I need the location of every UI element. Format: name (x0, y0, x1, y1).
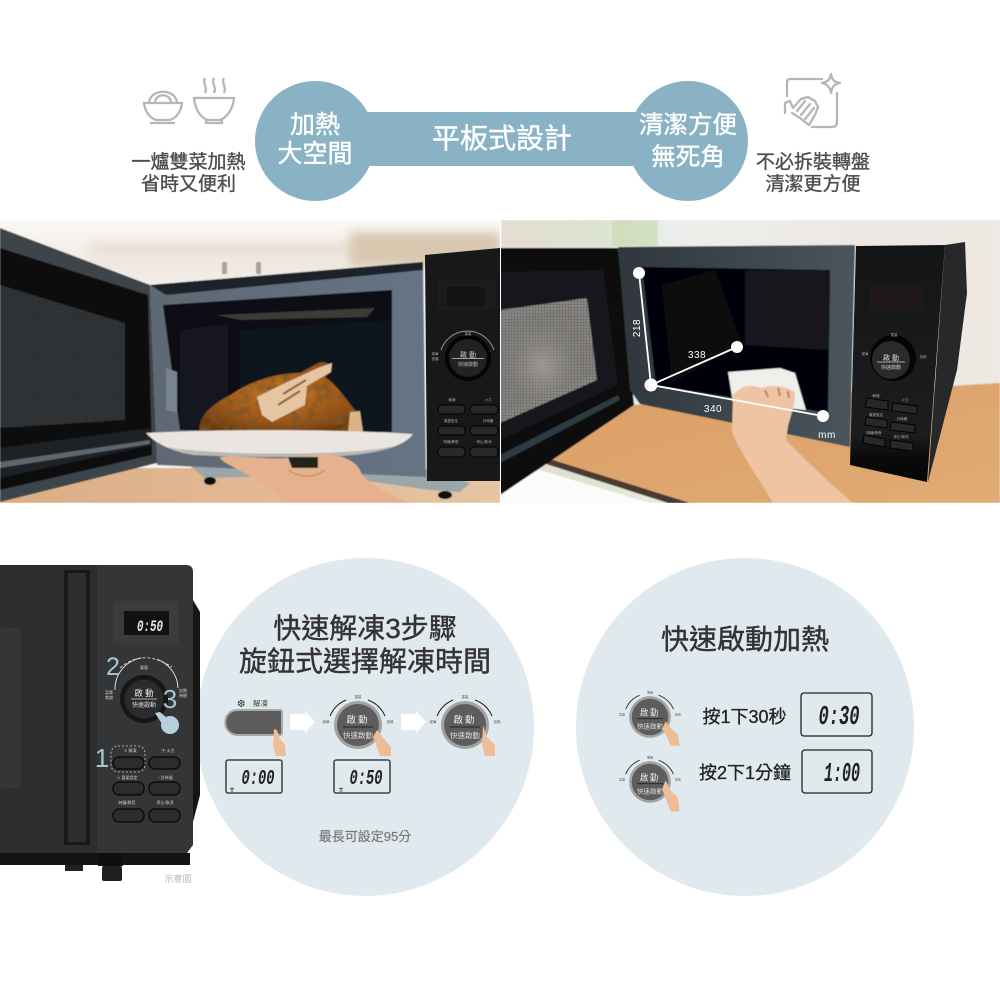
control panel: 解凍 (448, 397, 456, 402)
dial: press once: 重量 (647, 690, 653, 695)
dial with quick start: 重量 (140, 664, 148, 670)
text: heating: 加熱 (290, 111, 340, 139)
dial: press once: 加熱 (675, 711, 681, 716)
oven body (150, 262, 426, 477)
display 0:30 (801, 693, 872, 736)
heading: flat design: 平板式設計 (432, 123, 572, 154)
dial: press twice: 啟動 (640, 772, 660, 782)
open door (0, 228, 157, 502)
step 1: defrost button: 解凍 (253, 698, 268, 708)
step 3: dial: 啟動 (453, 714, 477, 726)
icon: pointing hand (155, 712, 179, 734)
dimension lines (633, 267, 829, 422)
button labels: ◔ 計時器 (157, 774, 173, 780)
dial: press once: 啟動 (640, 707, 660, 717)
control panel: 啟 動 (460, 350, 476, 359)
panel: defrost steps (225, 613, 501, 844)
control panel: 啟 動 (883, 353, 899, 362)
display 1:00: 1:00 (824, 760, 860, 790)
arm and hand (732, 386, 853, 503)
dial: press once: 快速啟動 (637, 721, 664, 730)
step 2: dial: 快速啟動 (343, 730, 373, 740)
control panel: 菜單 (432, 351, 439, 356)
control panel: 停止/取消 (894, 434, 909, 439)
control panel: 計時器 (483, 418, 494, 423)
roast chicken (199, 362, 363, 432)
dial with quick start: 快速啟動 (132, 701, 156, 709)
note: maximum 95 minutes: 最長可設定95分 (319, 829, 411, 844)
control panel: 快速啟動 (881, 364, 901, 371)
step 2: dial: 重量 (354, 694, 362, 699)
control panel (425, 248, 500, 481)
heading: knob-selected defrost time: 旋鈕式選擇解凍時間 (239, 646, 491, 677)
dial with quick start: 食譜 (105, 694, 113, 700)
control panel: 食譜 (432, 356, 439, 361)
control panel: 菜單 (862, 351, 869, 356)
step 1: defrost button: ❆ (237, 699, 245, 710)
text: two dishes: 一爐雙菜加熱 (131, 151, 246, 173)
circle: easy cleaning (628, 81, 748, 201)
oven body (618, 245, 855, 447)
text: large space: 大空間 (277, 140, 353, 168)
display 0:50: 0:50 (350, 768, 382, 791)
display 0:50 (124, 611, 169, 635)
dial: press twice (619, 755, 681, 812)
button labels: ▣ 火力 (161, 747, 175, 753)
text: easy to clean: 清潔方便 (639, 111, 737, 139)
dial with quick start: 加熱 (179, 687, 187, 693)
plate (146, 430, 413, 456)
display 0:00 (226, 760, 282, 794)
step 2: dial: 加熱 (386, 719, 394, 724)
oven cavity (642, 267, 830, 413)
icon: rice bowl (144, 92, 182, 123)
control panel: 快速啟動 (458, 361, 478, 368)
control panel: 火力 (902, 397, 909, 402)
text: no need to remove turntable: 不必拆裝轉盤 (756, 151, 870, 173)
button labels: 時鐘/靜音 (118, 799, 136, 805)
circle background: quick start (576, 558, 914, 896)
display 0:00: 0:00 (242, 768, 274, 791)
display 1:00 (802, 750, 872, 793)
step 2: dial (322, 694, 394, 756)
table cloth (728, 368, 806, 410)
control panel: 計時器 (897, 416, 908, 421)
step number 2: 2 (106, 653, 120, 681)
arrow 2 (401, 711, 426, 733)
control panel (850, 242, 967, 482)
circle: heating space (255, 81, 375, 201)
step 3: dial (430, 694, 501, 756)
bar connecting the circles (340, 112, 660, 166)
step number 3: 3 (163, 684, 177, 714)
text: cleaner and easier: 清潔更方便 (765, 173, 861, 195)
dial: press twice: 菜單 (619, 776, 625, 781)
dial: press once (619, 690, 681, 746)
step 3: dial: 加熱 (494, 719, 501, 724)
arrow 1 (290, 711, 315, 733)
text: no dead corners: 無死角 (651, 143, 725, 171)
button labels: ☆ 喜愛設定 (116, 774, 138, 780)
label: depth 338: 338 (688, 350, 706, 361)
hand holding plate (220, 455, 412, 503)
dial with quick start: 啟 動 (134, 688, 154, 698)
note: illustration: 示意圖 (164, 873, 192, 884)
icon: soup bowl with steam (194, 78, 234, 123)
step 3: dial: 快速啟動 (450, 730, 480, 740)
heading: quick start heating: 快速啟動加熱 (661, 624, 829, 655)
label: unit mm: mm (818, 430, 836, 441)
step 2: dial: 菜單 (322, 719, 330, 724)
step number 1: 1 (95, 743, 109, 773)
dial: press once: 菜單 (619, 711, 625, 716)
control panel: 火力 (484, 397, 492, 402)
display 0:00: ⇈ (229, 787, 235, 794)
panel: photo of cavity dimensions with wiping hand (500, 220, 1000, 503)
control panel: 重量 (890, 332, 898, 337)
dial: press twice: 重量 (647, 755, 653, 760)
six buttons (113, 757, 180, 822)
panel: photo of open microwave with roast chicken (0, 220, 500, 503)
dial with quick start: 菜單 (105, 689, 113, 695)
dial with quick start: 時間 (179, 692, 187, 698)
display 0:50: 0:50 (137, 618, 163, 636)
control panel: 解凍 (872, 393, 880, 398)
control panel: 加熱 (920, 354, 927, 359)
text: press once 30 seconds: 按1下30秒 (702, 707, 787, 727)
control panel: 時鐘/靜音 (867, 430, 882, 435)
display 0:50: ⇈ (338, 787, 344, 794)
silver base of oven (190, 466, 470, 492)
step 1: defrost button (225, 698, 286, 756)
step 3: dial: 重量 (462, 694, 469, 699)
control panel: 喜愛設定 (869, 412, 883, 417)
control panel: 重量 (464, 331, 472, 336)
button labels: 停止/取消 (156, 799, 174, 805)
button labels (116, 747, 175, 805)
dial: press twice: 快速啟動 (637, 786, 664, 795)
text: saves time: 省時又便利 (141, 173, 236, 195)
control panel: 喜愛設定 (444, 418, 458, 423)
open door (500, 248, 634, 495)
label: width 340: 340 (704, 404, 722, 415)
oven cavity (163, 290, 392, 432)
panel: quick start heating (619, 624, 872, 812)
dial: press twice: 加熱 (675, 776, 681, 781)
step 2: dial: 啟動 (346, 714, 370, 726)
display 0:30: 0:30 (818, 703, 860, 733)
dial with quick start (105, 658, 187, 723)
heading: defrost 3 steps: 快速解凍3步驟 (273, 613, 457, 644)
circle background: defrost steps (196, 558, 534, 896)
label: height 218: 218 (632, 319, 643, 337)
panel: feature banner (131, 74, 870, 201)
control panel: 時鐘/靜音 (444, 439, 459, 444)
text: press twice 1 minute: 按2下1分鐘 (699, 763, 791, 783)
button labels: ✽ 解凍 (123, 747, 137, 753)
dashed highlight around defrost (111, 746, 145, 772)
control panel: 停止/取消 (477, 439, 492, 444)
display 0:50 (334, 760, 390, 794)
panel: microwave front with numbered steps (0, 565, 200, 881)
icon: wiping hand with sparkle (785, 74, 840, 127)
step 3: dial: 菜單 (430, 719, 437, 724)
